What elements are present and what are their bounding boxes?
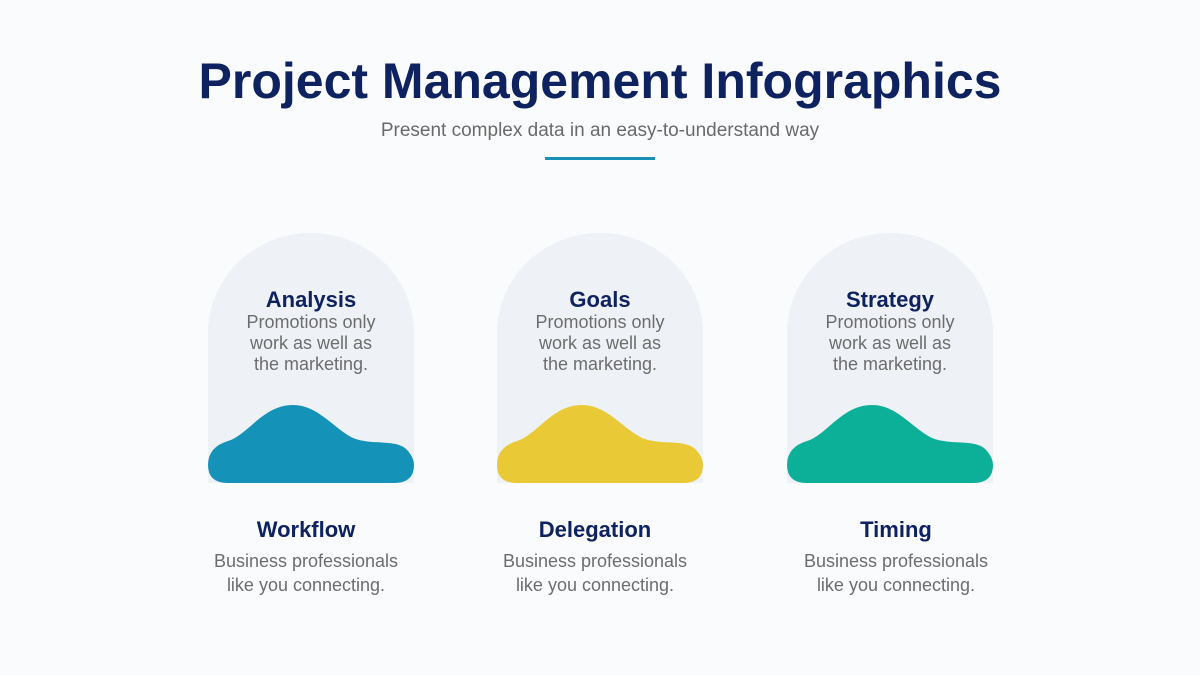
label: workflow — [214, 517, 398, 595]
text: work as well as — [250, 333, 372, 353]
heading: Goals — [569, 287, 631, 312]
text — [825, 312, 955, 374]
panel: strategy — [787, 233, 993, 483]
label: delegation: Delegation — [539, 517, 651, 542]
label: workflow: Business professionals — [214, 551, 398, 571]
subtitle: Present complex data in an easy-to-understand way — [381, 120, 819, 141]
panel: analysis — [208, 233, 414, 483]
label: timing: like you connecting. — [817, 575, 975, 595]
text: Promotions only — [825, 312, 955, 332]
label: workflow: Workflow — [257, 517, 355, 542]
label: delegation: like you connecting. — [516, 575, 674, 595]
panel: goals — [497, 233, 703, 483]
label: delegation: Business professionals — [503, 551, 687, 571]
text: work as well as — [829, 333, 951, 353]
label: timing: Timing — [860, 517, 932, 542]
text: Promotions only — [535, 312, 665, 332]
text: Promotions only — [246, 312, 376, 332]
text: work as well as — [539, 333, 661, 353]
title: Project Management Infographics — [199, 53, 1001, 109]
accent line — [545, 157, 655, 160]
heading: Analysis — [266, 287, 356, 312]
text: the marketing. — [833, 354, 947, 374]
label: delegation — [503, 517, 687, 595]
heading: Strategy — [846, 287, 934, 312]
label: workflow: like you connecting. — [227, 575, 385, 595]
text: the marketing. — [543, 354, 657, 374]
text — [246, 312, 376, 374]
label: timing — [804, 517, 988, 595]
text — [535, 312, 665, 374]
label: timing: Business professionals — [804, 551, 988, 571]
text: the marketing. — [254, 354, 368, 374]
